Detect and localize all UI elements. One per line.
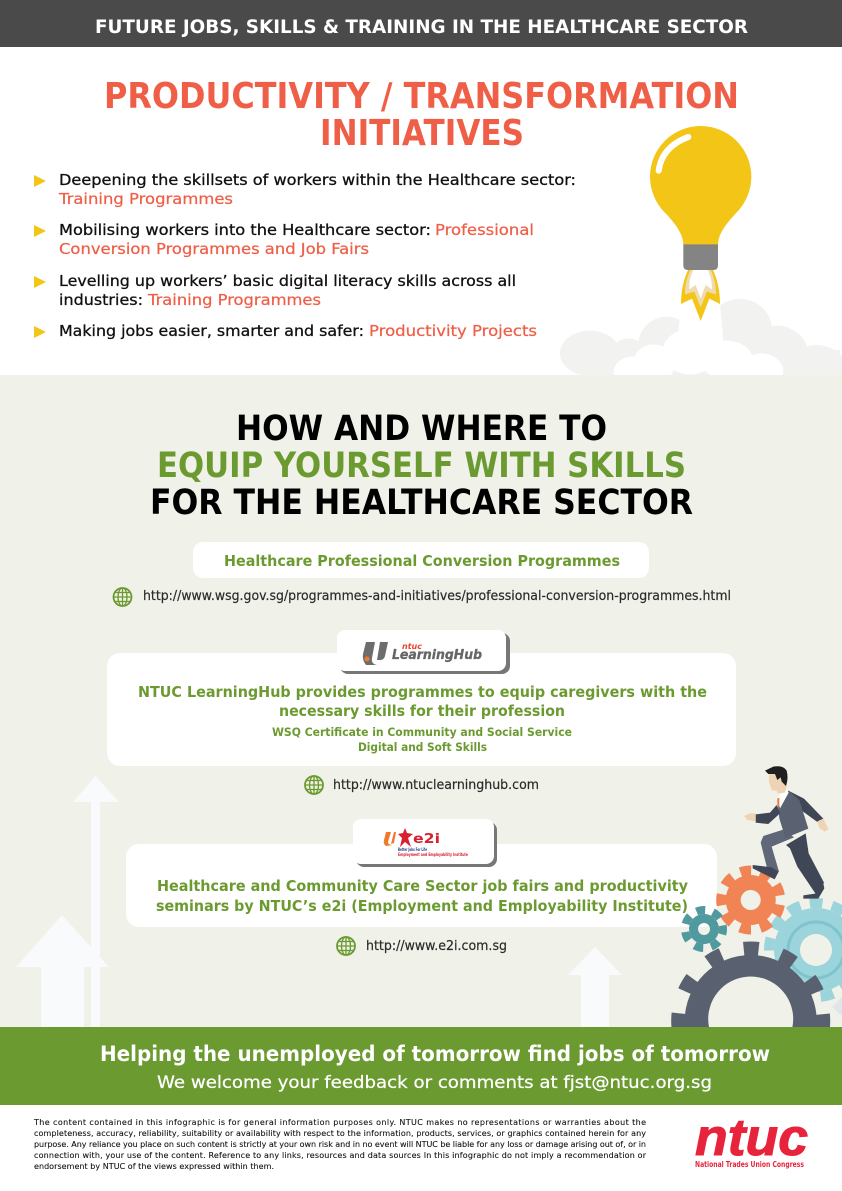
link: WSG: http://www.wsg.gov.sg/programmes-and-initiatives/professional-conversion-programmes.html: [143, 589, 731, 604]
disclaimer text: endorsement by NTUC of the views expressed within them.: [34, 1162, 274, 1171]
bullet 3: [34, 272, 516, 309]
logo tab: NTUC LearningHub: LearningHub: [392, 648, 482, 663]
logo: NTUC: ntuc: [695, 1109, 808, 1167]
illustration: businessman climbing: [744, 766, 829, 899]
bullet 1: Deepening the skillsets of workers within the Healthcare sector:: [59, 171, 576, 189]
bullet 3: industries:: [59, 291, 143, 309]
panel: NTUC LearningHub: necessary skills for their profession: [279, 702, 565, 720]
bullet 2: Professional: [435, 221, 534, 239]
disclaimer text: completeness, accuracy, reliability, suitability or availability with respect to the information, products, services, or graphics contained herein for any: [34, 1129, 646, 1138]
bullet 4: [34, 322, 537, 340]
disclaimer text: [33, 1118, 647, 1171]
bullet 1: [34, 171, 576, 208]
panel: conversion programmes: [193, 542, 649, 578]
panel: e2i: Healthcare and Community Care Sector job fairs and productivity: [157, 877, 688, 895]
logo tab: e2i: Better Jobs For Life: [398, 847, 427, 852]
bullet 2: Mobilising workers into the Healthcare sector:: [59, 221, 431, 239]
gear: dark slate: [671, 942, 830, 1027]
link: LearningHub: http://www.ntuclearninghub.com: [333, 778, 539, 793]
front arm: [756, 805, 780, 824]
header bar: [0, 0, 842, 47]
gear: light blue: [769, 903, 842, 997]
background arrows: [16, 776, 622, 1027]
panel: NTUC LearningHub: Digital and Soft Skills: [358, 740, 487, 754]
title: PRODUCTIVITY / TRANSFORMATION: [104, 76, 739, 117]
panel: conversion programmes: Healthcare Professional Conversion Programmes: [224, 552, 620, 570]
panel: NTUC LearningHub: WSQ Certificate in Community and Social Service: [272, 725, 572, 739]
icon: rocket light bulb: [650, 126, 751, 321]
logo tab: e2i: [353, 819, 497, 867]
logo tab: e2i: Employment and Employability Institute: [398, 852, 468, 857]
title: INITIATIVES: [320, 113, 524, 154]
link: e2i: [337, 937, 507, 955]
heading: how and where: HOW AND WHERE TO: [236, 409, 607, 449]
link: e2i: http://www.e2i.com.sg: [366, 939, 507, 954]
green banner: Helping the unemployed of tomorrow find jobs of tomorrow: [100, 1042, 770, 1066]
bullet 2: [34, 221, 534, 258]
illustration: smoke clouds: [560, 299, 842, 402]
torso: [777, 791, 808, 838]
gear: orange: [717, 866, 784, 934]
title: [104, 76, 739, 154]
disclaimer text: The content contained in this infographic is for general information purposes only. NTUC makes no representations or warranties about the: [33, 1118, 646, 1127]
logo tab: e2i: e2i: [413, 832, 440, 847]
disclaimer text: purpose. Any reliance you place on such content is strictly at your own risk and in no event will NTUC be liable for any loss or damage arising out of, or in: [34, 1140, 646, 1149]
green banner: We welcome your feedback or comments at fjst@ntuc.org.sg: [157, 1073, 712, 1093]
panel: e2i: seminars by NTUC’s e2i (Employment and Employability Institute): [156, 897, 688, 915]
panel: NTUC LearningHub: [107, 653, 736, 766]
initiatives list: [34, 171, 576, 340]
logo tab: NTUC LearningHub: [337, 630, 510, 674]
bullet 1: Training Programmes: [58, 190, 233, 208]
back leg: [786, 833, 824, 895]
bullet 2: Conversion Programmes and Job Fairs: [59, 240, 369, 258]
back arm: [786, 791, 823, 822]
heading: how and where: [150, 409, 693, 523]
green banner: [0, 1027, 842, 1105]
logo tab: NTUC LearningHub: ntuc: [402, 642, 422, 651]
panel: e2i: [126, 844, 717, 927]
bullet 4: Productivity Projects: [369, 322, 537, 340]
bullet 4: Making jobs easier, smarter and safer:: [59, 322, 364, 340]
logo: NTUC: National Trades Union Congress: [695, 1160, 804, 1169]
header bar: FUTURE JOBS, SKILLS & TRAINING IN THE HEALTHCARE SECTOR: [95, 16, 748, 38]
illustration: gears: [671, 866, 842, 1027]
front leg: [761, 829, 794, 874]
section background: beige: [0, 375, 842, 1027]
disclaimer text: connection with, your use of the content. Reference to any links, resources and data sources In this infographic do not imply a recommendation or: [34, 1151, 647, 1160]
heading: how and where: EQUIP YOURSELF WITH SKILLS: [157, 446, 686, 486]
bullet 3: Training Programmes: [147, 291, 321, 309]
panel: NTUC LearningHub: NTUC LearningHub provides programmes to equip caregivers with the: [138, 683, 707, 701]
gear: pale grey: [832, 997, 842, 1016]
bullet 3: Levelling up workers’ basic digital literacy skills across all: [59, 272, 516, 290]
gear: teal: [682, 907, 726, 951]
head: [769, 772, 787, 793]
heading: how and where: FOR THE HEALTHCARE SECTOR: [150, 483, 693, 523]
